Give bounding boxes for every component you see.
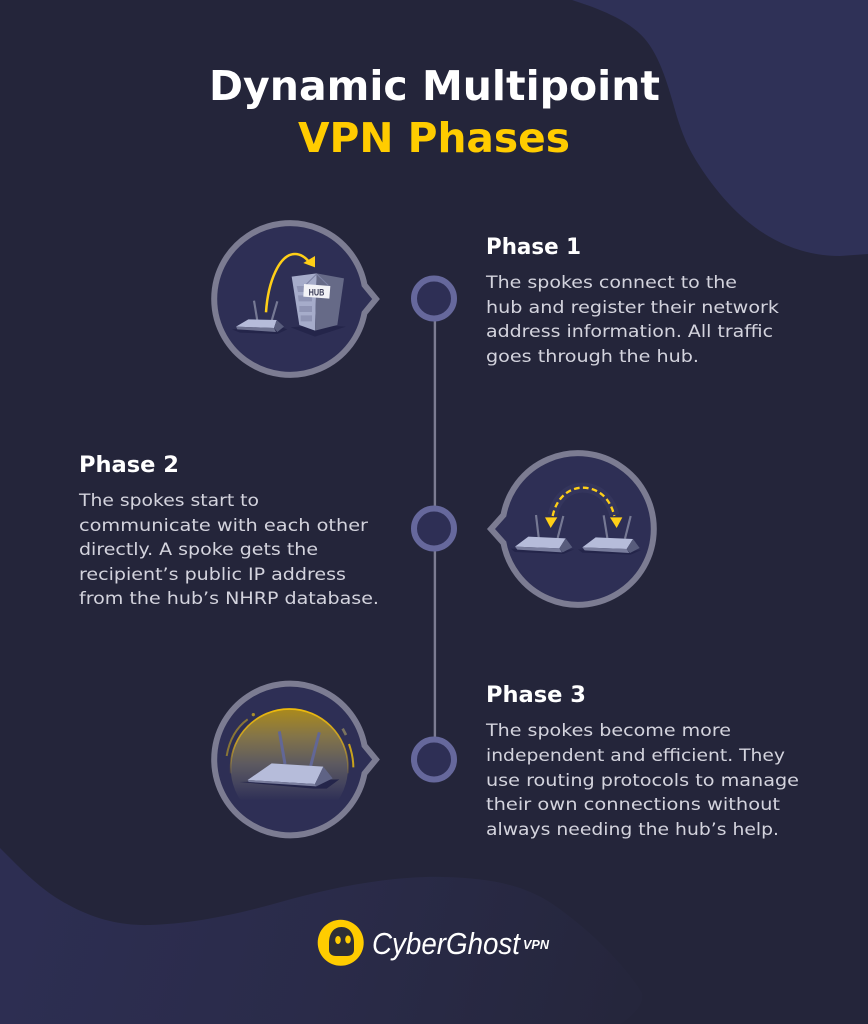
body: phase 1: goes through the hub. [486,347,699,367]
background blob: top right [572,0,868,256]
timeline line [434,298,436,759]
body: phase 3: always needing the hub’s help. [486,820,779,840]
router and hub illustration [232,254,346,337]
body: phase 3 [485,721,799,840]
speech bubble 1 [214,223,376,375]
timeline node 3 [414,740,454,780]
body: phase 2: communicate with each other [79,516,369,536]
heading: phase 2: Phase 2 [79,453,179,478]
text block: phase 3 [485,683,799,840]
body: phase 3: use routing protocols to manage [486,771,799,791]
heading: phase 3: Phase 3 [486,683,586,708]
body: phase 2: The spokes start to [78,491,259,511]
body: phase 1: hub and register their network [486,298,779,318]
wordmark VPN: VPN [523,938,550,952]
text block: phase 1 [485,235,779,367]
title: Dynamic Multipoint [209,62,660,110]
heading: phase 1: Phase 1 [486,235,581,260]
timeline node 1 [414,278,454,318]
icon: phase 1 spoke connecting to hub [214,223,376,375]
body: phase 1: The spokes connect to the [485,273,737,293]
wordmark: CyberGhost [372,926,521,961]
speech bubble 3 [214,684,376,835]
title [209,62,660,162]
glowing router [227,709,353,826]
timeline node 2 [414,508,454,548]
body: phase 3: their own connections without [486,795,780,815]
text block: phase 2 [78,453,379,609]
body: phase 3: The spokes become more [485,721,731,741]
icon: phase 3 independent spoke [214,684,376,835]
icon: ghost badge [318,920,364,966]
router and hub illustration: HUB [309,287,325,297]
logo: CyberGhost VPN [318,920,550,966]
body: phase 3: independent and efficient. They [486,746,785,766]
body: phase 2: recipient’s public IP address [79,565,346,585]
title: VPN Phases [298,114,570,162]
two routers and dashed arrow [511,488,641,555]
speech bubble 2 [491,453,654,605]
body: phase 2: directly. A spoke gets the [79,540,318,560]
body: phase 2 [78,491,379,609]
body: phase 1: address information. All traffic [486,322,773,342]
background blob: bottom left [0,848,642,1024]
icon: phase 2 spokes communicating directly [491,453,654,605]
body: phase 1 [485,273,779,367]
body: phase 2: from the hub’s NHRP database. [79,589,379,609]
